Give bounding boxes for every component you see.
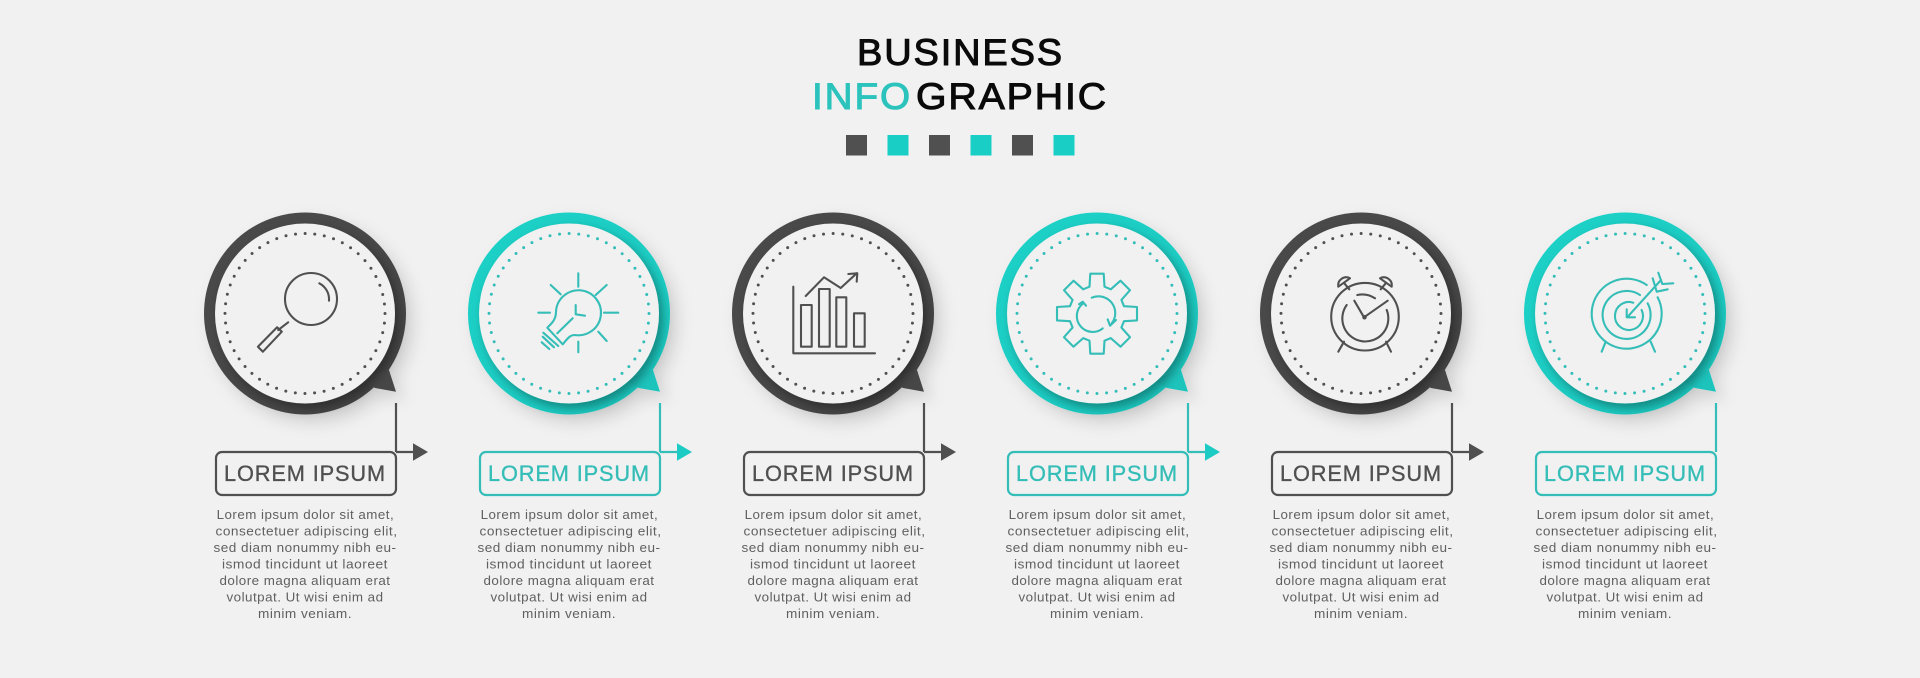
speech-bubble circle 6 [1524,212,1726,414]
icon: alarm clock [1331,277,1399,352]
description text 6: consectetuer adipiscing elit, [1536,524,1718,538]
description text 5: dolore magna aliquam erat [1276,574,1447,588]
description text 6: volutpat. Ut wisi enim ad [1546,590,1704,604]
panel: step 4 gear [996,212,1220,621]
description text 5: volutpat. Ut wisi enim ad [1282,590,1440,604]
description text 4: consectetuer adipiscing elit, [1008,524,1190,538]
label box with arrow 5: LOREM IPSUM [1280,461,1442,486]
description text 4 [1006,508,1190,621]
description text 3: dolore magna aliquam erat [748,574,919,588]
description text 2: ismod tincidunt ut laoreet [486,557,652,571]
label box with arrow 4 [1008,403,1220,495]
description text 1: ismod tincidunt ut laoreet [222,557,388,571]
description text 4: Lorem ipsum dolor sit amet, [1009,508,1186,522]
description text 1: dolore magna aliquam erat [220,574,391,588]
title: INFO [812,76,912,117]
icon: magnifying glass [258,273,337,352]
description text 4: dolore magna aliquam erat [1012,574,1183,588]
title: GRAPHIC [916,76,1108,117]
panel: step 6 target [1524,212,1726,621]
panel: step 3 chart [732,212,956,621]
description text 6 [1534,508,1718,621]
description text 1: consectetuer adipiscing elit, [216,524,398,538]
description text 4: volutpat. Ut wisi enim ad [1018,590,1176,604]
label box with arrow 2 [480,403,692,495]
title: BUSINESS [857,32,1064,73]
description text 2 [478,508,662,621]
icon: light bulb [538,273,618,352]
speech-bubble circle 1 [204,212,406,414]
description text 3: ismod tincidunt ut laoreet [750,557,916,571]
description text 4: ismod tincidunt ut laoreet [1014,557,1180,571]
icon: target with arrow [1592,273,1673,352]
description text 1: volutpat. Ut wisi enim ad [226,590,384,604]
description text 3 [742,508,926,621]
speech-bubble circle 4 [996,212,1198,414]
description text 2: sed diam nonummy nibh eu- [478,541,660,555]
icon: gear with refresh arrows [1057,274,1137,354]
description text 5: Lorem ipsum dolor sit amet, [1273,508,1450,522]
description text 2: volutpat. Ut wisi enim ad [490,590,648,604]
label box with arrow 1: LOREM IPSUM [224,461,386,486]
panel: step 5 alarm clock [1260,212,1484,621]
description text 3: sed diam nonummy nibh eu- [742,541,924,555]
label box with arrow 3 [744,403,956,495]
description text 2: minim veniam. [522,607,616,621]
label box with arrow 5 [1272,403,1484,495]
description text 2: dolore magna aliquam erat [484,574,655,588]
description text 6: dolore magna aliquam erat [1540,574,1711,588]
description text 3: volutpat. Ut wisi enim ad [754,590,912,604]
speech-bubble circle 2 [468,212,670,414]
description text 5: consectetuer adipiscing elit, [1272,524,1454,538]
label box 6 [1536,403,1716,495]
description text 1: sed diam nonummy nibh eu- [214,541,396,555]
description text 5: minim veniam. [1314,607,1408,621]
description text 1 [214,508,398,621]
description text 4: sed diam nonummy nibh eu- [1006,541,1188,555]
description text 6: minim veniam. [1578,607,1672,621]
description text 3: Lorem ipsum dolor sit amet, [745,508,922,522]
description text 3: consectetuer adipiscing elit, [744,524,926,538]
description text 5: ismod tincidunt ut laoreet [1278,557,1444,571]
label box 6: LOREM IPSUM [1544,461,1706,486]
panel: step 1 magnifier [204,212,428,621]
description text 6: sed diam nonummy nibh eu- [1534,541,1716,555]
title [812,32,1108,117]
description text 1: Lorem ipsum dolor sit amet, [217,508,394,522]
icon: bar chart with trend arrow [793,273,875,353]
label box with arrow 4: LOREM IPSUM [1016,461,1178,486]
description text 3: minim veniam. [786,607,880,621]
panel: step 2 light bulb [468,212,692,621]
description text 2: consectetuer adipiscing elit, [480,524,662,538]
speech-bubble circle 5 [1260,212,1462,414]
speech-bubble circle 3 [732,212,934,414]
description text 1: minim veniam. [258,607,352,621]
decorative square row [846,135,1074,156]
description text 4: minim veniam. [1050,607,1144,621]
description text 6: Lorem ipsum dolor sit amet, [1537,508,1714,522]
label box with arrow 1 [216,403,428,495]
description text 5 [1270,508,1454,621]
description text 6: ismod tincidunt ut laoreet [1542,557,1708,571]
label box with arrow 3: LOREM IPSUM [752,461,914,486]
description text 5: sed diam nonummy nibh eu- [1270,541,1452,555]
label box with arrow 2: LOREM IPSUM [488,461,650,486]
description text 2: Lorem ipsum dolor sit amet, [481,508,658,522]
